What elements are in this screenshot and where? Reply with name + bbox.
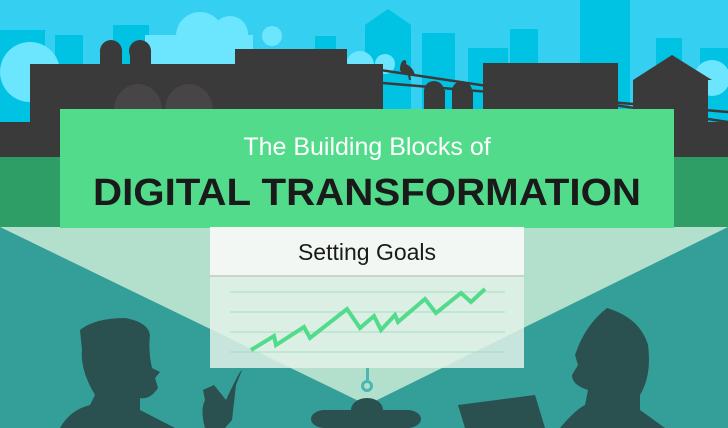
title banner [60, 109, 674, 228]
projector beam [0, 227, 728, 405]
line chart [230, 289, 505, 352]
ground [0, 157, 728, 229]
icon: bird [400, 60, 415, 80]
clouds [0, 12, 728, 102]
background skyline [0, 0, 728, 125]
teal floor [0, 228, 728, 428]
power lines [347, 65, 728, 122]
dome windows [114, 84, 213, 122]
screen panel [210, 227, 524, 368]
dark buildings [0, 40, 728, 158]
title line 2: DIGITAL TRANSFORMATION [93, 172, 641, 214]
person left [60, 318, 242, 428]
person right [458, 308, 665, 428]
heading: setting goals: Setting Goals [298, 239, 436, 265]
sky [0, 0, 728, 125]
title line 1: The Building Blocks of [243, 133, 491, 161]
projector [311, 368, 421, 428]
